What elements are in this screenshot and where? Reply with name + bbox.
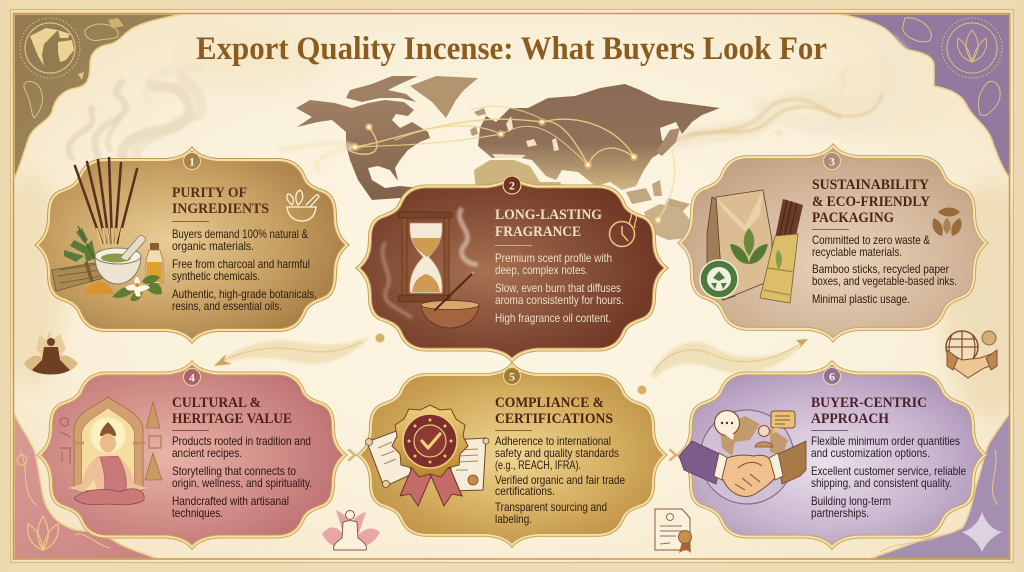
icon: clock with smoke (610, 214, 636, 246)
icon: globe and handshake (946, 331, 997, 378)
heading: & ECO-FRIENDLY (812, 194, 930, 210)
corner ornament: top left globe (14, 14, 182, 177)
body text: partnerships. (811, 507, 869, 520)
corner ornament: bottom left rose (14, 413, 158, 559)
heading: FRAGRANCE (495, 224, 581, 240)
british isles and iceland (470, 108, 486, 136)
body text: Verified organic and fair trade (495, 474, 625, 487)
body text: Transparent sourcing and (495, 501, 607, 514)
heading: APPROACH (811, 411, 889, 427)
body text: Excellent customer service, reliable (811, 465, 966, 478)
arrow: panel 5 swoosh to panel 3 (638, 339, 808, 394)
heading (495, 395, 613, 427)
panel 6: buyer-centric approach (679, 363, 985, 547)
body text (172, 228, 317, 313)
badge 3: 3 (829, 154, 835, 168)
badge 4: 4 (189, 370, 195, 384)
badge 5 (504, 368, 520, 384)
body text: Minimal plastic usage. (812, 293, 910, 306)
icon: recycling leaves (932, 208, 962, 236)
north america (296, 100, 430, 200)
body text: organic materials. (172, 240, 254, 253)
illustration: hourglass and incense bowl (383, 208, 479, 328)
body text: and customization options. (811, 447, 930, 460)
heading: HERITAGE VALUE (172, 411, 292, 427)
heading: BUYER-CENTRIC (811, 395, 927, 411)
body text: synthetic chemicals. (172, 270, 260, 283)
heading: SUSTAINABILITY (812, 177, 929, 193)
arctic islands (346, 76, 418, 102)
body text: (e.g., REACH, IFRA). (495, 459, 581, 472)
body text: shipping, and consistent quality. (811, 477, 952, 490)
australia (644, 204, 692, 240)
illustration: medal and certificates (366, 405, 489, 506)
panel 2: long-lasting fragrance (358, 176, 666, 360)
smoke: left plume (68, 68, 201, 160)
body text: safety and quality standards (495, 447, 619, 460)
route nodes (351, 118, 662, 224)
heading (172, 185, 269, 217)
icon: brown lotus meditator (24, 330, 78, 374)
icon: certificate document (655, 509, 692, 553)
badge 1: 1 (189, 154, 195, 168)
body text (495, 252, 624, 325)
heading: PURITY OF (172, 185, 247, 201)
heading: COMPLIANCE & (495, 395, 604, 411)
body text: techniques. (172, 507, 223, 520)
illustration: handshake over globe (679, 410, 806, 504)
body text: Buyers demand 100% natural & (172, 228, 308, 241)
body text: resins, and essential oils. (172, 300, 282, 313)
body text: High fragrance oil content. (495, 312, 611, 325)
body text: Free from charcoal and harmful (172, 258, 310, 271)
illustration: incense sticks, mortar and herbs (52, 158, 163, 301)
eurasia (478, 84, 720, 190)
body text: Committed to zero waste & (812, 234, 930, 247)
africa and arabia (474, 160, 566, 192)
heading (172, 395, 292, 427)
heading: CERTIFICATIONS (495, 411, 613, 427)
arrow: panel 3 swoosh to panel 4 (214, 334, 384, 366)
panel connector chevrons (349, 450, 676, 460)
world map (280, 76, 720, 240)
body text: Products rooted in tradition and (172, 435, 311, 448)
badge 2 (503, 176, 521, 194)
glowing trade routes (280, 106, 675, 220)
body text: certifications. (495, 485, 555, 498)
title: Export Quality Incense: What Buyers Look For (196, 31, 827, 67)
smoke: right plume (668, 45, 911, 142)
badge 2: 2 (509, 178, 515, 192)
heading: PACKAGING (812, 210, 894, 226)
greenland (410, 76, 478, 118)
body text: Bamboo sticks, recycled paper (812, 263, 949, 276)
body text: Flexible minimum order quantities (811, 435, 960, 448)
body text: Handcrafted with artisanal (172, 495, 289, 508)
body text: origin, wellness, and spirituality. (172, 477, 312, 490)
heading: INGREDIENTS (172, 201, 269, 217)
panel 1: purity of ingredients (37, 149, 347, 341)
panel 4: cultural and heritage value (39, 363, 345, 547)
body text: Building long-term (811, 495, 891, 508)
body text: Adherence to international (495, 435, 611, 448)
body text: deep, complex notes. (495, 264, 588, 277)
body text (812, 234, 957, 306)
heading (495, 207, 602, 240)
body text: recyclable materials. (812, 246, 902, 259)
panel 5: compliance and certifications (359, 365, 665, 545)
body text (811, 435, 966, 520)
icon: herb mortar outline (287, 190, 319, 221)
body text: Premium scent profile with (495, 252, 612, 265)
body text (172, 435, 312, 520)
badge 4 (184, 368, 200, 386)
south east asia islands (626, 180, 690, 212)
corner ornament: bottom right purple (870, 413, 1010, 559)
panel 3: sustainability and eco-friendly packaging (680, 146, 986, 340)
japan (656, 128, 680, 156)
body text: Slow, even burn that diffuses (495, 282, 621, 295)
corner ornament: top right lotus (840, 14, 1010, 177)
body text: boxes, and vegetable-based inks. (812, 275, 957, 288)
badge 6: 6 (829, 370, 835, 384)
body text: Authentic, high-grade botanicals, (172, 288, 317, 301)
badge 5: 5 (509, 370, 515, 384)
icon: rose lotus meditator outline (322, 510, 380, 550)
heading: LONG-LASTING (495, 207, 602, 223)
body text: aroma consistently for hours. (495, 294, 624, 307)
body text: ancient recipes. (172, 447, 242, 460)
badge 3 (824, 152, 840, 170)
body text: Storytelling that connects to (172, 465, 296, 478)
body text: labeling. (495, 513, 532, 526)
heading (812, 177, 930, 226)
badge 6 (824, 368, 840, 384)
badge 1 (184, 152, 200, 170)
illustration: meditating buddha in arch (60, 397, 162, 505)
seas (492, 116, 559, 158)
body text (495, 435, 625, 526)
heading: CULTURAL & (172, 395, 261, 411)
heading (811, 395, 927, 427)
illustration: paper bag and bamboo tube (700, 190, 803, 303)
